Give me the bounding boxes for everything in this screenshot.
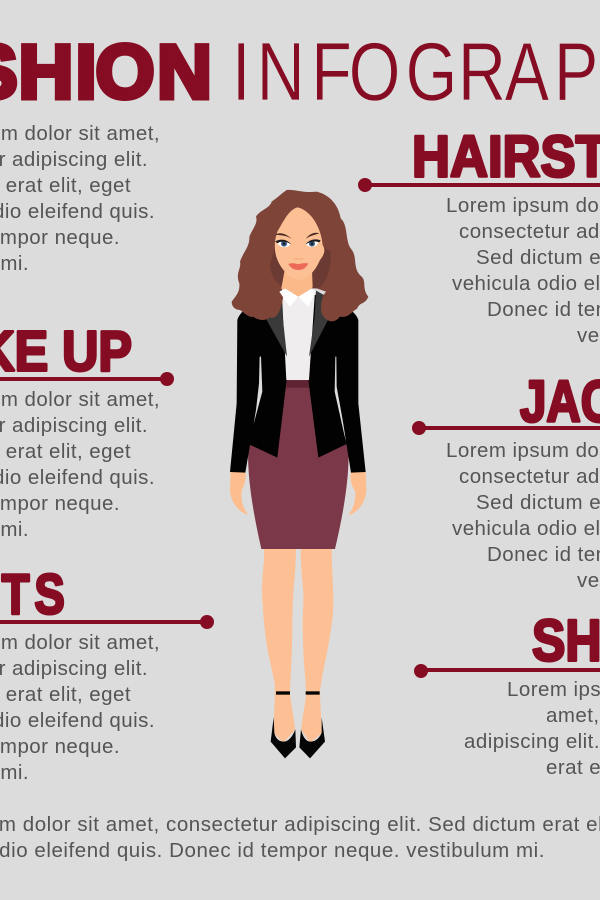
figure: woman in business outfit	[230, 190, 368, 758]
collar	[279, 289, 316, 307]
text block: middle right	[446, 439, 600, 592]
text block: top right	[446, 194, 600, 347]
jacket	[230, 295, 366, 473]
lapels	[267, 291, 328, 357]
hands	[230, 471, 366, 516]
heading: jacket	[412, 370, 600, 435]
text block: lower right	[464, 678, 600, 779]
text block: middle left	[0, 388, 160, 541]
hair	[232, 190, 368, 321]
heading: shoes	[414, 608, 600, 678]
heading: boots	[0, 562, 214, 629]
skirt	[248, 380, 349, 549]
legs	[262, 547, 333, 743]
text block: lower left	[0, 631, 160, 784]
shirt	[282, 292, 315, 380]
text block: footer	[0, 813, 600, 862]
shoes	[271, 691, 325, 758]
title	[0, 25, 600, 118]
neck	[281, 270, 313, 297]
text block: top left	[0, 122, 160, 275]
face	[275, 207, 324, 280]
